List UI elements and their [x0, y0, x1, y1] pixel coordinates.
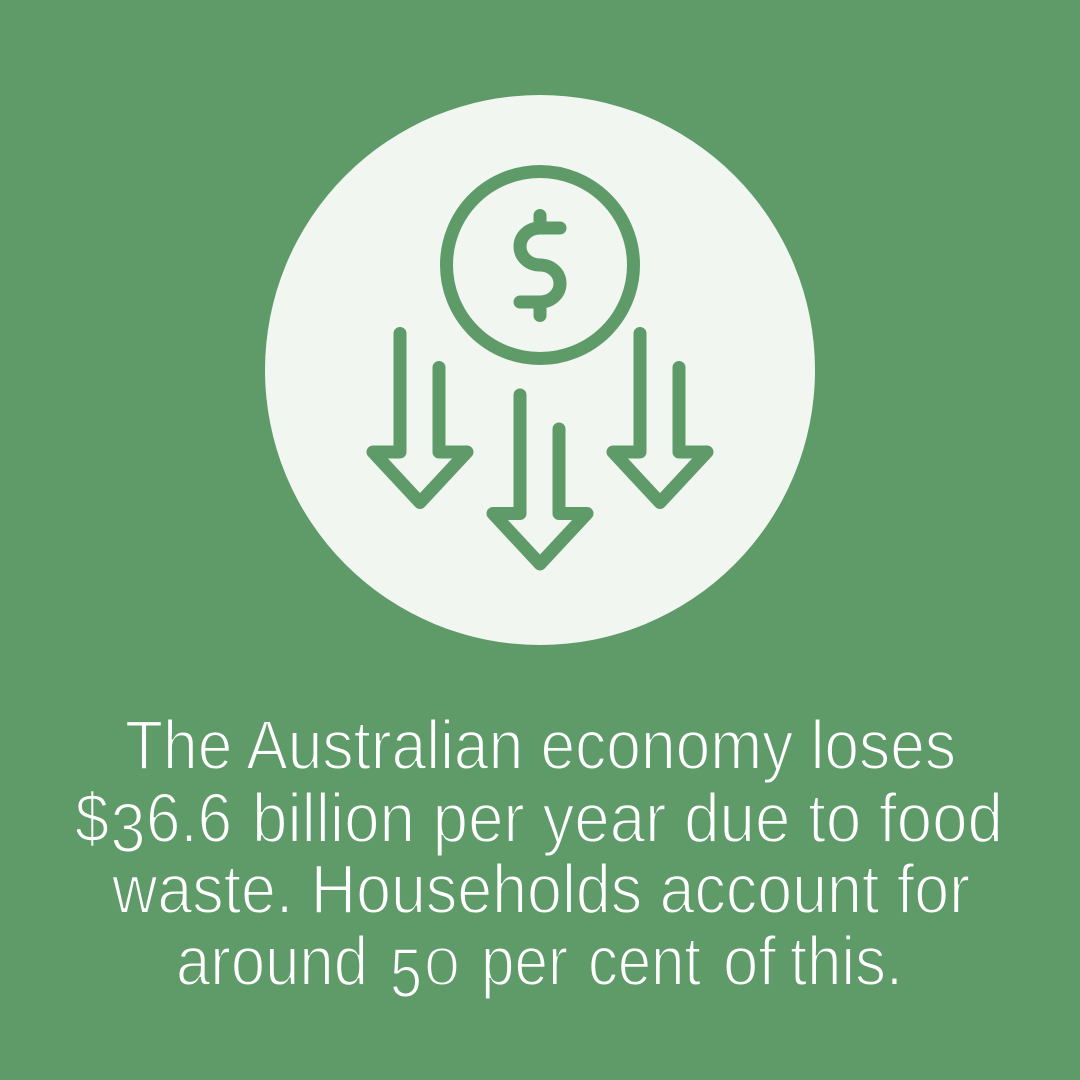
caption line 3: waste. Households account for	[111, 850, 970, 928]
caption line 2	[75, 779, 1003, 867]
caption line 4: 0	[424, 936, 460, 997]
arrow: right	[613, 334, 707, 502]
caption line 1: The Australian economy loses	[125, 706, 956, 784]
caption line 2: 3	[110, 789, 146, 867]
caption line 4: around	[176, 922, 368, 1000]
icon: dollar sign	[520, 216, 560, 316]
caption line 4: cent	[588, 922, 701, 1000]
caption line 4: 5	[390, 934, 422, 1012]
caption line 2: $	[75, 779, 109, 857]
arrow: centre	[493, 395, 587, 564]
caption line 4: this.	[790, 922, 903, 1000]
text block: caption	[75, 706, 1003, 1012]
arrow: left	[373, 334, 467, 502]
caption line 4: per	[481, 922, 568, 1000]
caption line 2: billion per year due to food	[252, 779, 1003, 857]
caption line 2: 6.6	[146, 779, 232, 857]
caption line 4: of	[723, 922, 776, 1000]
caption line 4	[176, 922, 903, 1012]
panel: pale circle	[265, 95, 815, 645]
icon: falling money	[373, 172, 707, 564]
icon: coin ring	[446, 172, 634, 358]
